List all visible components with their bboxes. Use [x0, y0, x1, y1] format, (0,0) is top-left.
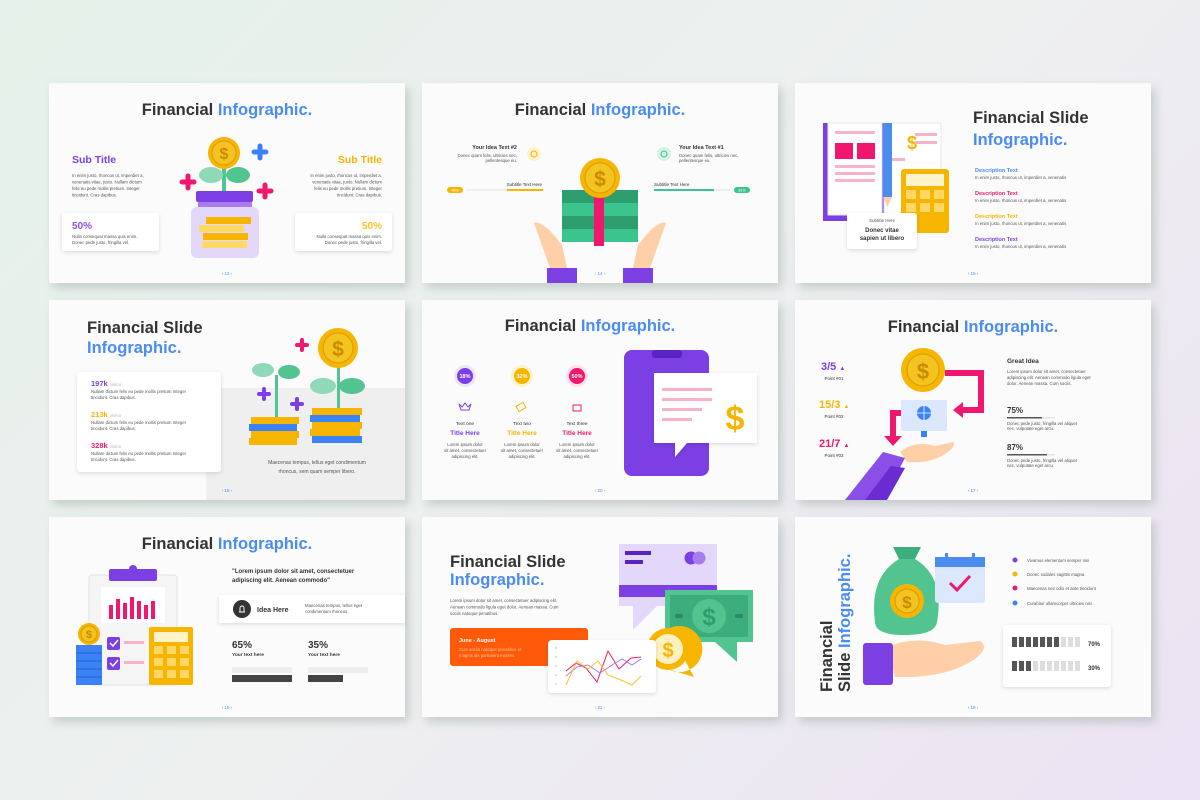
- illustration: credit card bubble: [619, 544, 717, 630]
- idea here bar: Maecenas tempus, tellus eget: [305, 603, 363, 608]
- description list: Description Text: [975, 168, 1018, 174]
- right idea text: [657, 145, 738, 163]
- title: [87, 319, 203, 357]
- left stat card 50%: [62, 213, 159, 251]
- description list: Description Text: [975, 214, 1018, 220]
- left stat card 50%: Donec pede justo, fringilla vel.: [72, 240, 129, 245]
- column 3: 50%: [571, 374, 583, 380]
- body text: sociis natoque penatibus.: [450, 611, 498, 616]
- orange callout: Cum sociis natoque penatibus et: [459, 647, 522, 652]
- stat 65%: Your text here: [232, 652, 264, 658]
- right stat card 50%: Donec pede justo, fringilla vel.: [325, 240, 382, 245]
- callout: subtitle box: [847, 213, 917, 249]
- page number: ‹ 18 ›: [968, 705, 979, 710]
- bullet list: Maecenas nec odio et ante tincidunt: [1027, 586, 1097, 591]
- bullet list: Donec sodales sagittis magna: [1027, 572, 1085, 577]
- caption: Maecenas tempus, tellus eget condimentum: [268, 460, 366, 466]
- orange callout: [450, 628, 588, 666]
- points list: Point #03: [824, 453, 844, 458]
- great idea text: [1007, 358, 1091, 386]
- column 1: 18%: [459, 374, 471, 380]
- stats card: 197k visitor: [91, 379, 122, 388]
- line chart card: 2: [555, 673, 557, 677]
- vertical title: [818, 554, 854, 692]
- callout: subtitle box: Subtitle Here: [869, 218, 896, 223]
- slide 8: card, money and chart: [422, 517, 778, 717]
- great idea text: Great Idea: [1007, 358, 1039, 365]
- illustration: clipboard, chart, calculator, coins: $: [86, 629, 92, 641]
- orange callout: magnis dis parturient montes.: [459, 653, 515, 658]
- column 2: 32%: [516, 374, 528, 380]
- column 1: sit amet, consectetuer: [444, 448, 487, 453]
- idea here bar: condimentum rhoncus.: [305, 609, 348, 614]
- line chart card: 0: [555, 682, 557, 686]
- right sub title text: [310, 154, 383, 198]
- title: Financial Infographic.: [142, 535, 312, 553]
- stat 65%: [232, 640, 292, 682]
- right idea text: Donec quam felis, ultricies nec,: [679, 153, 738, 158]
- points list: 15/3 ▲: [819, 399, 849, 411]
- points list: Point #02: [824, 414, 844, 419]
- body text: [450, 598, 559, 616]
- progress 87%: 87%: [1007, 443, 1023, 452]
- right stat card 50%: 50%: [362, 221, 382, 232]
- caption: [268, 460, 366, 475]
- stats card: tincidunt. Cras dapibus.: [91, 457, 136, 462]
- line chart card: 8: [555, 646, 557, 650]
- column 2: Text two: [513, 421, 531, 427]
- column 3: sit amet, consectetuer: [556, 448, 599, 453]
- illustration: coin plant jar: [182, 137, 271, 258]
- title: Financial Slide: [87, 319, 203, 337]
- stats card: Nullam dictum felis eu pede mollis pretium Integer: [91, 420, 187, 425]
- page number: ‹ 17 ›: [968, 488, 979, 493]
- slide 5: phone chat: [422, 300, 778, 500]
- left idea text: [458, 145, 541, 163]
- left sub title text: felis eu pede mollis pretium. Integer: [72, 186, 140, 191]
- left idea text: Donec quam felis, ultricies nec,: [458, 153, 517, 158]
- vertical title: Slide Infographic.: [836, 554, 854, 692]
- description list: In enim justo, rhoncus ut, imperdiet a, venenatis: [975, 198, 1066, 203]
- left sub title text: Sub Title: [72, 154, 116, 166]
- line chart card: [548, 640, 656, 693]
- left sub title text: [72, 154, 144, 198]
- illustration: coin plant jar: $: [220, 146, 229, 163]
- progress 75%: [1007, 406, 1078, 431]
- right sub title text: tincidunt. Cras dapibus.: [337, 192, 382, 198]
- description list: Description Text: [975, 237, 1018, 243]
- right sub title text: felis eu pede mollis pretium. Integer: [314, 186, 383, 191]
- progress 75%: Donec pede justo, fringilla vel aliquet: [1007, 421, 1078, 426]
- body text: Lorem ipsum dolor sit amet, consectetuer adipiscing elit.: [450, 598, 557, 603]
- progress 87%: nec, vulputate eget arcu.: [1007, 463, 1054, 468]
- column 2: Title Here: [507, 430, 537, 437]
- right idea text: pellentesque eu.: [679, 158, 711, 163]
- illustration: plants on coins: $: [332, 338, 344, 361]
- title: Infographic.: [450, 571, 544, 589]
- title: Financial Infographic.: [888, 318, 1058, 336]
- description list: Description Text: [975, 191, 1018, 197]
- people stats card: [1003, 625, 1111, 687]
- title: Infographic.: [87, 339, 181, 357]
- left idea text: Your Idea Text #2: [472, 145, 517, 151]
- page number: ‹ 20 ›: [595, 488, 606, 493]
- stats card: 213k visitor: [91, 410, 122, 419]
- title: Financial Infographic.: [142, 101, 312, 119]
- left stat card 50%: Nulla consequat massa quis enim.: [72, 234, 137, 239]
- illustration: plants on coins: [249, 328, 365, 445]
- illustration: money bubble: $: [702, 604, 716, 631]
- title: Financial Infographic.: [505, 317, 675, 335]
- great idea text: dolor. Aenean massa. Cum sociis.: [1007, 381, 1072, 386]
- column 3: Lorem ipsum dolor: [559, 442, 595, 447]
- stats card: Nullam dictum felis eu pede mollis pretium Integer: [91, 389, 187, 394]
- quote: adipiscing elit. Aenean commodo": [232, 578, 330, 584]
- bullet list: [1012, 558, 1097, 606]
- slide 2: money in hands: [422, 83, 778, 283]
- stat 35%: Your text here: [308, 652, 340, 658]
- left sub title text: tincidunt. Cras dapibus.: [72, 192, 117, 198]
- great idea text: adipiscing elit. Aenean commodo ligula eget: [1007, 375, 1091, 380]
- callout: subtitle box: Donec vitae: [865, 228, 899, 234]
- illustration: money stack and hands: [534, 158, 666, 283]
- column 1: [444, 365, 487, 459]
- slide 9: money bag vertical title: [795, 517, 1151, 717]
- illustration: money bubble: [665, 590, 753, 662]
- stat 35%: [308, 640, 368, 682]
- left idea text: pellentesque eu.: [485, 158, 517, 163]
- column 2: [501, 365, 544, 459]
- column 1: adipiscing elit.: [452, 454, 478, 459]
- caption: rhoncus, sem quam semper libero.: [279, 469, 355, 475]
- column 3: Title Here: [562, 430, 592, 437]
- column 2: Lorem ipsum dolor: [504, 442, 540, 447]
- column 2: sit amet, consectetuer: [501, 448, 544, 453]
- progress 75%: 75%: [1007, 406, 1023, 415]
- stat 65%: 65%: [232, 640, 252, 651]
- progress 87%: [1007, 443, 1078, 468]
- people stats card: 70%: [1088, 642, 1101, 648]
- illustration: coin, monitor, arrows, hand: $: [917, 359, 929, 384]
- stats card: 328k visitor: [91, 441, 122, 450]
- column 3: adipiscing elit.: [564, 454, 590, 459]
- illustration: coin, monitor, arrows, hand: [845, 348, 981, 500]
- bullet list: Curabitur ullamcorper ultricies nisi: [1027, 601, 1092, 606]
- right stat card 50%: [295, 213, 392, 251]
- body text: Aenean commodo ligula eget dolor. Aenean massa. Cum: [450, 604, 559, 610]
- title: Infographic.: [973, 131, 1067, 149]
- title: Financial Slide: [450, 553, 566, 571]
- bullet list: Vivamus elementum semper nisi: [1027, 558, 1089, 563]
- right sub title text: venenatis vitae, justo. Nullam dictum: [312, 180, 382, 184]
- title: Financial Infographic.: [515, 101, 685, 119]
- column 1: Lorem ipsum dolor: [447, 442, 483, 447]
- orange callout: June - August: [459, 638, 496, 644]
- idea here bar: Idea Here: [257, 607, 289, 614]
- column 1: Title Here: [450, 430, 480, 437]
- left progress bar: 48%: [451, 188, 459, 192]
- great idea text: Lorem ipsum dolor sit amet, consectetuer: [1007, 369, 1086, 374]
- illustration: coin bubble: $: [662, 640, 674, 662]
- column 1: Text one: [456, 421, 474, 427]
- left progress bar: Subtitle Text Here: [507, 182, 542, 187]
- points list: 21/7 ▲: [819, 438, 849, 450]
- illustration: money bag, calendar, hand: $: [902, 593, 912, 612]
- illustration: document and calculator: [823, 123, 949, 233]
- column 2: adipiscing elit.: [508, 454, 536, 459]
- description list: In enim justo, rhoncus ut, imperdiet a, venenatis: [975, 244, 1066, 249]
- illustration: phone with chat bubble: $: [726, 400, 745, 438]
- left stat card 50%: 50%: [72, 221, 92, 232]
- stats card: Nullam dictum felis eu pede mollis pretium Integer: [91, 451, 187, 456]
- slide 1: financial infographic jar: [49, 83, 405, 283]
- progress 75%: nec, vulputate eget arcu.: [1007, 426, 1054, 431]
- illustration: clipboard, chart, calculator, coins: [76, 565, 193, 685]
- stats card: [77, 372, 221, 472]
- right progress bar: Subtitle Text Here: [654, 182, 690, 187]
- line chart card: 6: [555, 655, 557, 659]
- left sub title text: In enim justo, rhoncus ut, imperdiet a,: [72, 173, 144, 178]
- right progress bar: [654, 182, 750, 193]
- stats card: tincidunt. Cras dapibus.: [91, 395, 136, 400]
- illustration: phone with chat bubble: [624, 350, 757, 476]
- points list: [819, 361, 849, 458]
- left progress bar: [447, 182, 543, 193]
- right stat card 50%: Nulla consequat massa quis enim.: [317, 234, 382, 239]
- page number: ‹ 21 ›: [595, 705, 606, 710]
- right idea text: Your Idea Text #1: [679, 145, 724, 151]
- quote: "Lorem ipsum dolor sit amet, consectetuer: [232, 569, 355, 575]
- column 3: Text three: [566, 421, 588, 427]
- title: [973, 109, 1089, 149]
- progress 87%: Donec pede justo, fringilla vel aliquet: [1007, 458, 1078, 463]
- illustration: money bag, calendar, hand: [863, 547, 985, 685]
- stats card: tincidunt. Cras dapibus.: [91, 426, 136, 431]
- right sub title text: In enim justo, rhoncus ut, imperdiet a,: [310, 173, 382, 178]
- slide 6: coin to hand: [795, 300, 1151, 500]
- page number: ‹ 13 ›: [222, 271, 233, 276]
- description list: [975, 168, 1066, 249]
- points list: Point #01: [824, 376, 844, 381]
- left sub title text: venenatis vitae, justo. Nullam dictum: [72, 180, 142, 184]
- illustration: money stack and hands: $: [594, 168, 606, 191]
- page number: ‹ 15 ›: [968, 271, 979, 276]
- vertical title: Financial: [818, 620, 836, 692]
- illustration: coin bubble: [647, 626, 702, 677]
- slide 3: financial slide documents: [795, 83, 1151, 283]
- description list: In enim justo, rhoncus ut, imperdiet a, venenatis: [975, 175, 1066, 180]
- title: [450, 553, 566, 589]
- page number: ‹ 16 ›: [222, 488, 233, 493]
- page number: ‹ 19 ›: [222, 705, 233, 710]
- column 3: [556, 365, 599, 459]
- points list: 3/5 ▲: [821, 361, 845, 373]
- callout: subtitle box: sapien ut libero: [860, 236, 905, 242]
- people stats card: 30%: [1088, 666, 1101, 672]
- quote: [232, 569, 355, 584]
- idea here bar: [219, 595, 405, 623]
- right sub title text: Sub Title: [338, 154, 382, 166]
- description list: In enim justo, rhoncus ut, imperdiet a, venenatis: [975, 221, 1066, 226]
- page number: ‹ 14 ›: [595, 271, 606, 276]
- right progress bar: 81%: [738, 188, 746, 192]
- stat 35%: 35%: [308, 640, 328, 651]
- slide 7: clipboard report: [49, 517, 405, 717]
- slide 4: plants and coins: [49, 300, 405, 500]
- line chart card: 4: [555, 664, 557, 668]
- title: Financial Slide: [973, 109, 1089, 127]
- illustration: document and calculator: $: [907, 133, 917, 153]
